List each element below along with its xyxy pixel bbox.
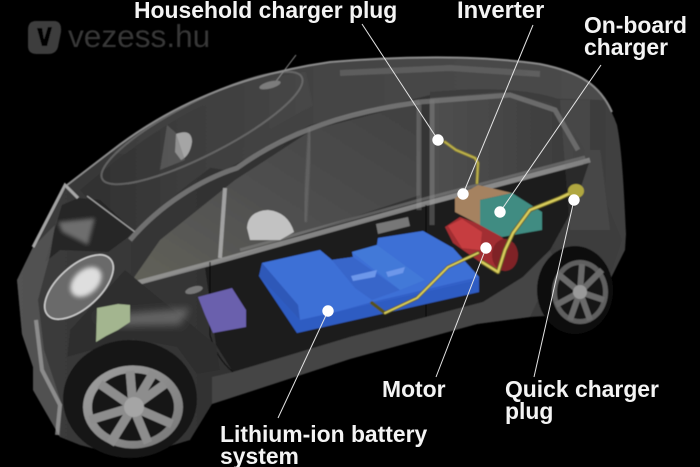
windshield bbox=[80, 72, 312, 235]
callout: household charger plug bbox=[134, 0, 444, 146]
rear body bbox=[430, 89, 622, 275]
interior mirror bbox=[175, 132, 192, 160]
lower door panel dark bbox=[205, 160, 590, 372]
component: green module bbox=[96, 304, 130, 342]
A-pillar and roof highlights bbox=[130, 102, 420, 240]
callout: quick charger plug: Quick charger bbox=[505, 376, 659, 402]
car body silhouette bbox=[17, 57, 626, 458]
front bumper bbox=[17, 225, 62, 437]
headlight bbox=[34, 243, 124, 331]
component: motor bbox=[445, 217, 518, 273]
callout: lithium-ion battery system bbox=[220, 305, 428, 467]
callout: motor bbox=[382, 242, 492, 402]
callout: motor: Motor bbox=[382, 376, 446, 402]
watermark: vezess.hu: vezess.hu bbox=[68, 18, 210, 54]
hood bbox=[45, 198, 135, 262]
car illustration bbox=[17, 53, 626, 458]
high-voltage cables bbox=[372, 142, 584, 313]
door mirror bbox=[247, 210, 294, 240]
rear wheel bbox=[537, 246, 613, 334]
side windows bbox=[133, 102, 420, 284]
front wheel bbox=[63, 340, 197, 458]
callout: on-board charger: charger bbox=[584, 34, 668, 60]
component: purple box bbox=[198, 288, 246, 333]
fender bbox=[67, 270, 220, 374]
callout: lithium-ion battery system: Lithium-ion battery bbox=[220, 421, 428, 447]
callout: quick charger plug bbox=[505, 194, 659, 424]
component: battery bbox=[259, 231, 479, 333]
callout: quick charger plug: plug bbox=[505, 398, 553, 424]
callout: inverter bbox=[457, 0, 544, 200]
antenna bbox=[274, 55, 296, 84]
callout: on-board charger bbox=[494, 12, 687, 218]
roof panel bbox=[110, 57, 605, 170]
component: on-board charger bbox=[480, 193, 542, 237]
door handles bbox=[184, 217, 410, 296]
component: inverter bbox=[455, 185, 512, 225]
sill bbox=[212, 250, 556, 404]
callout: on-board charger: On-board bbox=[584, 12, 687, 38]
